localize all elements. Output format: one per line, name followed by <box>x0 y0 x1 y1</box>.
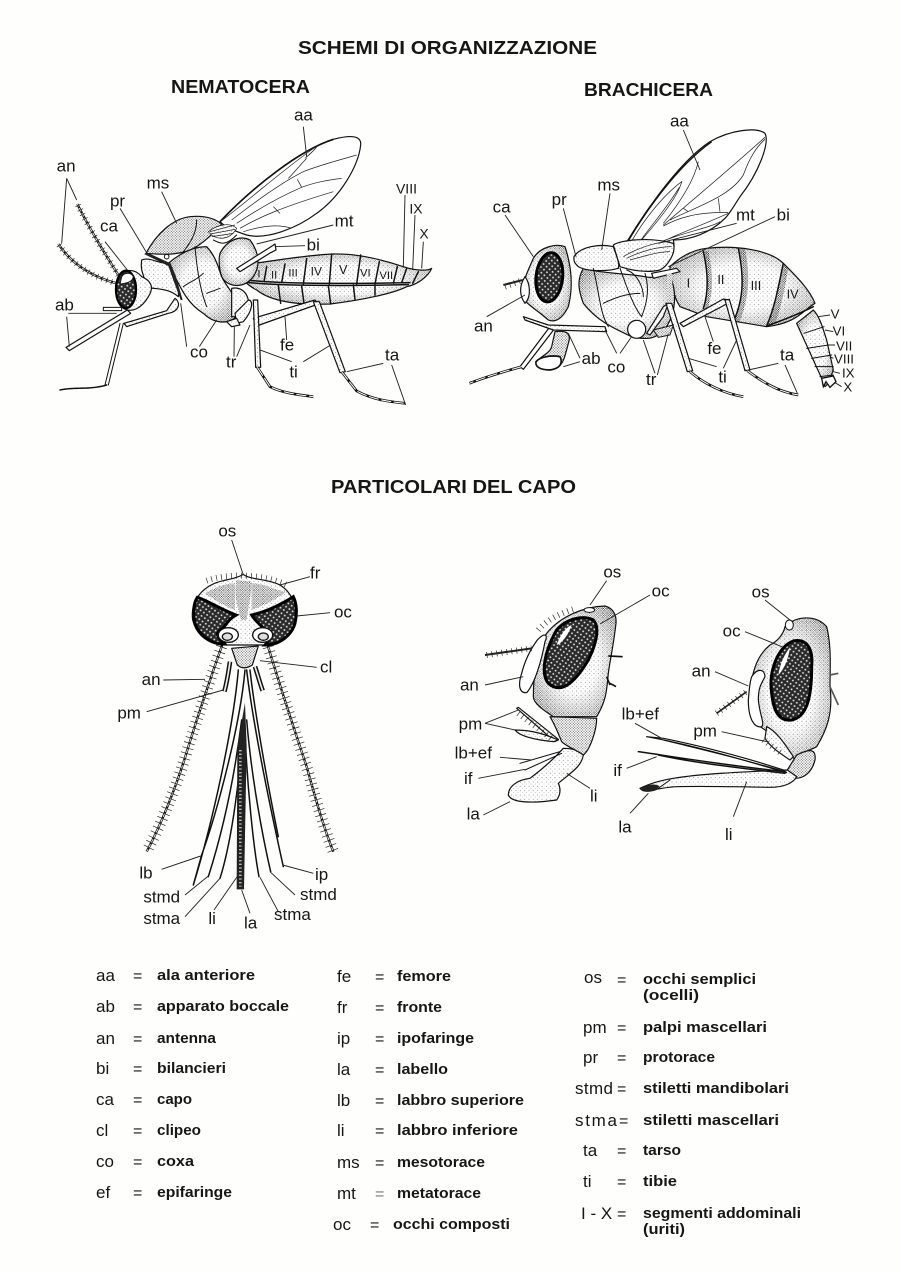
legend: column 3: = <box>619 1113 628 1130</box>
labels: lb+ef <box>455 743 492 762</box>
labels: I <box>257 268 260 280</box>
legend: column 2: fe <box>337 967 351 986</box>
labels: pm <box>117 703 141 722</box>
legend: column 1: capo <box>157 1091 192 1108</box>
legend: column 2: ip <box>337 1029 350 1048</box>
legend: column 1: apparato boccale <box>157 998 289 1015</box>
labels: lb <box>139 863 153 882</box>
labels: li <box>590 787 598 806</box>
legend: column 3 <box>575 968 801 1238</box>
legend: column 3: occhi semplici <box>643 971 756 988</box>
labels: an <box>142 670 161 689</box>
labels: ab <box>582 349 601 368</box>
right head: mouthparts <box>638 727 815 792</box>
legend: column 2 <box>333 967 524 1234</box>
labels: V <box>831 306 840 321</box>
legend: column 3: palpi mascellari <box>643 1019 767 1036</box>
legend: column 3: stmd <box>575 1079 613 1098</box>
legend: column 3: tarso <box>643 1142 681 1159</box>
head and compound eye <box>116 270 151 310</box>
labels: IV <box>311 265 322 279</box>
labels: II <box>717 273 724 287</box>
labels: if <box>613 761 622 780</box>
labels: oc <box>723 622 741 641</box>
labels: ms <box>597 176 620 195</box>
labels: mt <box>335 212 354 231</box>
abdomen <box>670 247 836 387</box>
legend: column 2: occhi composti <box>393 1216 510 1233</box>
labels: an <box>57 157 76 176</box>
labels: ti <box>289 362 298 381</box>
labels: III <box>751 279 761 293</box>
right head: capsule and eye <box>717 618 838 760</box>
legend: column 1: = <box>133 1031 142 1048</box>
legend: column 2: lb <box>337 1091 350 1110</box>
haltere <box>237 244 276 272</box>
labels: la <box>467 804 480 823</box>
legend: column 2: = <box>375 1123 384 1140</box>
title: SCHEMI DI ORGANIZZAZIONE <box>298 38 597 58</box>
legend: column 3: pm <box>583 1018 607 1037</box>
labels: VI <box>833 323 845 338</box>
labels: II <box>271 269 277 281</box>
legend: column 1: coxa <box>157 1153 195 1170</box>
labels: aa <box>670 112 689 131</box>
labels: an <box>474 317 493 336</box>
labels: la <box>244 913 258 932</box>
legend: column 3: os <box>584 968 602 987</box>
labels: X <box>843 379 852 394</box>
mouthparts <box>193 670 283 889</box>
labels: li <box>208 909 216 928</box>
legend: column 2: = <box>375 1155 384 1172</box>
wing <box>220 137 361 236</box>
legend: column 3: = <box>617 1081 626 1098</box>
diagram: Brachicera insect <box>469 112 855 397</box>
antennae <box>147 642 333 852</box>
labels: li <box>725 825 733 844</box>
labels: ca <box>100 217 118 236</box>
labels: os <box>218 522 236 541</box>
legend: column 2: metatorace <box>397 1185 481 1202</box>
labels: VII <box>836 339 852 354</box>
legend: column 2: ms <box>337 1153 360 1172</box>
legend: column 1: ef <box>96 1183 110 1202</box>
legend: column 1: bilancieri <box>157 1060 226 1077</box>
labels: stma <box>274 905 311 924</box>
legend: column 2: = <box>375 969 384 986</box>
legend: column 1: = <box>133 1061 142 1078</box>
antennae <box>58 204 118 283</box>
heading: Brachicera: BRACHICERA <box>584 80 713 100</box>
labels: if <box>464 769 473 788</box>
labels <box>55 106 429 405</box>
legend: column 1: epifaringe <box>157 1184 232 1201</box>
labels: ta <box>385 346 400 365</box>
legend: column 3: segmenti addominali <box>643 1205 801 1222</box>
labels: VI <box>360 268 371 280</box>
legend: column 3: = <box>617 1206 626 1223</box>
legend: column 1: ala anteriore <box>157 967 255 984</box>
labels: fe <box>707 339 722 358</box>
labels <box>455 562 790 844</box>
legend: column 1: antenna <box>157 1030 217 1047</box>
labels: VIII <box>396 180 417 196</box>
heading: Particolari del capo: PARTICOLARI DEL CAPO <box>331 477 576 497</box>
labels: co <box>190 342 208 361</box>
legend: column 3: = <box>617 1050 626 1067</box>
diagram: Nematocera insect <box>55 106 432 405</box>
labels: oc <box>652 582 670 601</box>
labels: tr <box>646 370 657 389</box>
labels: oc <box>334 602 352 621</box>
legend: column 3: stma <box>575 1111 618 1130</box>
legend: column 3: stiletti mascellari <box>643 1112 779 1129</box>
clypeus <box>232 646 258 668</box>
legend: column 2: = <box>375 1186 384 1203</box>
legend: column 3: protorace <box>643 1049 715 1066</box>
labels: pr <box>552 190 567 209</box>
labels: cl <box>320 658 332 677</box>
labels: os <box>752 582 770 601</box>
legend: column 3: = <box>617 1174 626 1191</box>
thorax <box>141 216 258 322</box>
labels: aa <box>294 106 313 125</box>
labels: mt <box>736 206 755 225</box>
legend: column 2: labello <box>397 1061 448 1078</box>
diagram: mosquito head, front view <box>117 522 352 932</box>
legend: column 2: femore <box>397 968 451 985</box>
left head: palps <box>515 707 558 742</box>
legend: column 3: tibie <box>643 1173 677 1190</box>
left head: labium and labellum <box>508 717 597 802</box>
legend: column 2: ipofaringe <box>397 1030 474 1047</box>
legend: column 1: ab <box>96 997 115 1016</box>
legend: column 1: an <box>96 1029 115 1048</box>
legs <box>647 299 798 397</box>
legend: column 2: labbro superiore <box>397 1092 524 1109</box>
legend: column 2: labbro inferiore <box>397 1122 518 1139</box>
legend: column 3: (uriti) <box>643 1221 685 1238</box>
legend: column 1: = <box>133 1185 142 1202</box>
labels: bi <box>777 206 790 225</box>
legend: column 3: ta <box>583 1141 598 1160</box>
labels: IV <box>787 287 799 301</box>
legend: column 1: cl <box>96 1121 108 1140</box>
labels: fr <box>310 563 321 582</box>
labels: stmd <box>300 885 337 904</box>
abdomen <box>245 254 432 304</box>
legend: column 1: = <box>133 999 142 1016</box>
diagram: heads, side views <box>455 562 838 844</box>
labels: X <box>419 225 429 241</box>
legend: column 1: = <box>133 1123 142 1140</box>
legend: column 2: fronte <box>397 999 442 1016</box>
labels: VIII <box>834 351 854 366</box>
mouthparts <box>66 307 131 351</box>
legend: column 1: co <box>96 1152 114 1171</box>
legend: column 2: = <box>375 1093 384 1110</box>
legend: column 1: = <box>133 1092 142 1109</box>
labels: VII <box>379 270 393 282</box>
labels: ms <box>147 173 169 192</box>
legend: column 1 <box>96 966 289 1202</box>
legend: column 1: = <box>133 968 142 985</box>
left head: capsule and eye <box>485 606 623 717</box>
legend: column 1: bi <box>96 1059 109 1078</box>
labels <box>474 112 855 394</box>
labels: an <box>460 676 479 695</box>
labels: pr <box>110 192 125 211</box>
labels: III <box>288 268 298 280</box>
labels: an <box>692 662 711 681</box>
antenna and lower labium <box>469 317 607 383</box>
labels: pm <box>459 714 482 733</box>
legend: column 2: mesotorace <box>397 1154 485 1171</box>
compound eyes <box>194 597 296 645</box>
labels: V <box>339 263 348 277</box>
legend: column 3: ti <box>583 1172 592 1191</box>
wing <box>618 130 766 264</box>
labels: os <box>603 562 621 581</box>
labels: bi <box>307 236 320 255</box>
legend: column 2: = <box>370 1217 379 1234</box>
labels: ip <box>315 865 328 884</box>
legend: column 2: = <box>375 1062 384 1079</box>
labels: ca <box>493 198 511 217</box>
legend: column 2: la <box>337 1060 351 1079</box>
legend: column 3: pr <box>583 1048 598 1067</box>
labels: IX <box>842 365 855 380</box>
legend: column 3: = <box>617 1143 626 1160</box>
labels: ta <box>780 346 795 365</box>
heading: Nematocera: NEMATOCERA <box>171 77 310 97</box>
legend: column 3: = <box>617 972 626 989</box>
labels: stmd <box>143 888 180 907</box>
head and compound eye <box>503 245 571 321</box>
maxillary palps <box>224 662 263 692</box>
legend: column 3: (ocelli) <box>643 987 699 1004</box>
legend: column 1: clipeo <box>157 1122 201 1139</box>
legend: column 2: mt <box>337 1184 356 1203</box>
labels: fe <box>280 336 294 355</box>
labels: tr <box>226 352 237 371</box>
labels: ab <box>55 296 74 315</box>
labels <box>117 522 352 932</box>
head capsule <box>192 574 296 645</box>
antennal sockets <box>218 628 273 642</box>
legend: column 3: = <box>617 1020 626 1037</box>
legend: column 2: fr <box>337 998 348 1017</box>
legend: column 2: li <box>337 1121 345 1140</box>
labels: ti <box>718 368 727 387</box>
legend: column 3: stiletti mandibolari <box>643 1080 789 1097</box>
labels: stma <box>143 909 181 928</box>
legend: column 2: oc <box>333 1215 351 1234</box>
legend: column 1: ca <box>96 1090 114 1109</box>
labels: co <box>607 358 625 377</box>
labels: IX <box>409 200 423 216</box>
labels: I <box>687 276 690 290</box>
labels: pm <box>693 722 717 741</box>
legend: column 2: = <box>375 1000 384 1017</box>
legend: column 1: aa <box>96 966 115 985</box>
thorax <box>574 240 680 339</box>
legend: column 3: I - X <box>581 1204 612 1223</box>
labels: la <box>618 818 632 837</box>
labels: lb+ef <box>622 704 659 723</box>
legs <box>60 298 405 403</box>
legend: column 1: = <box>133 1154 142 1171</box>
legend: column 2: = <box>375 1031 384 1048</box>
